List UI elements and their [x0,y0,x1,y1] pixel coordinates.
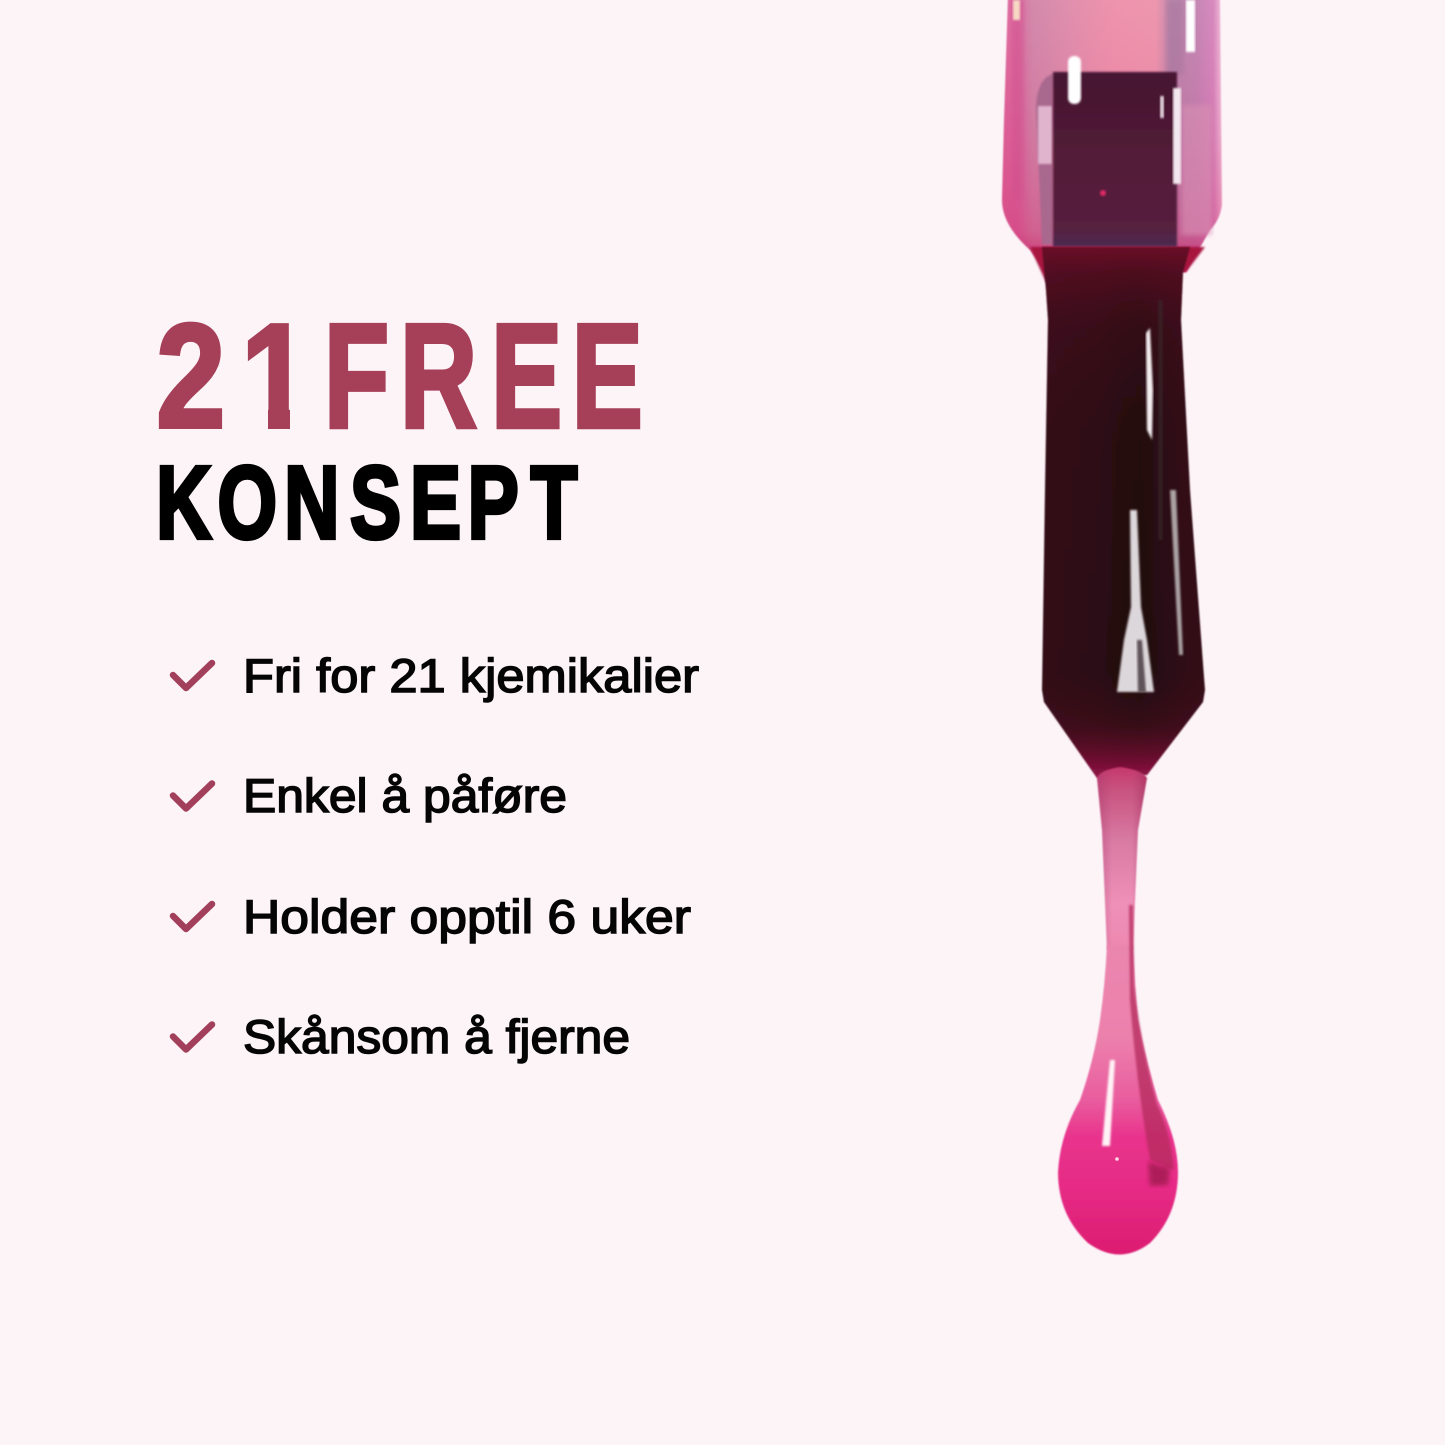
title: 21FREE: 21 [156,293,310,458]
subtitle: KONSEPT: KONSEPT [156,446,577,561]
dark polish body [1030,247,1205,778]
title: 21FREE [156,293,643,459]
translucent pink brush top [1002,0,1222,272]
dark square core [1053,56,1181,247]
droplet [1058,905,1178,1254]
title: 21FREE: FREE [324,294,643,459]
list item: Enkel å påføre: Enkel å påføre [243,769,567,822]
list item: Holder opptil 6 uker: Holder opptil 6 uker [243,890,691,943]
nail polish brush with drip [1002,0,1222,1254]
list item: Skånsom å fjerne: Skånsom å fjerne [243,1010,630,1063]
list item: Fri for 21 kjemikalier: Fri for 21 kjemikalier [243,649,699,702]
checklist [173,649,699,1063]
pink drip strand [1097,767,1147,950]
